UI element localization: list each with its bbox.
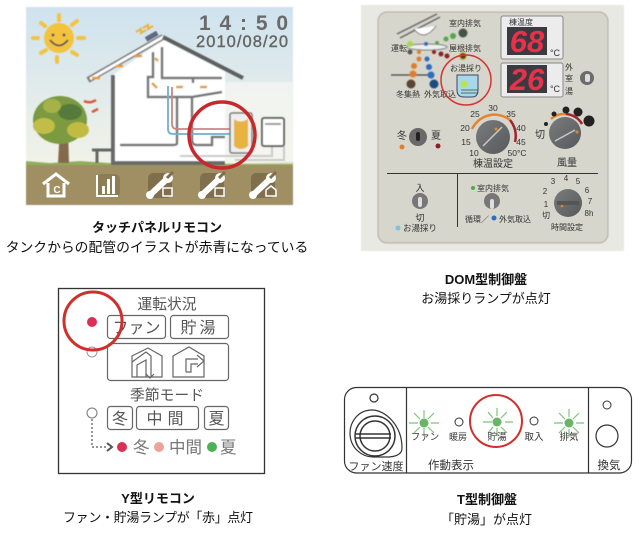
caption: touch panel remote: タッチパネルリモコン (92, 220, 222, 235)
highlight circle (470, 395, 522, 447)
lamp: fan: ファン (411, 432, 439, 443)
board labels (391, 18, 482, 99)
button: fan (108, 316, 166, 338)
board labels: 冬集熱 (396, 89, 420, 99)
airflow diagram (391, 14, 468, 88)
caption: T-type control board (441, 492, 532, 527)
board labels: 外気取込 (424, 89, 456, 99)
toggle: hot water: お湯採り (403, 223, 437, 233)
photo background (361, 5, 624, 251)
toggle: ventilation: 室内排気 (477, 183, 509, 193)
icon: wrench tank (198, 172, 225, 199)
button: hot water storage (170, 316, 228, 338)
knob: airflow (535, 106, 594, 169)
knob: timer (542, 174, 593, 232)
button: mid season: 中間 (146, 410, 189, 428)
highlight circle (441, 55, 491, 105)
lamp: season mode (87, 408, 97, 418)
caption: touch panel remote (6, 220, 308, 255)
knob: timer: 1 (544, 200, 549, 209)
knob: timer: 切 (542, 211, 550, 220)
caption: Y-type remote (63, 491, 253, 525)
panel frame (58, 288, 264, 474)
caption: touch panel remote: タンクからの配管のイラストが赤青になっている (6, 240, 308, 255)
toggle: hot water: 切 (415, 213, 425, 223)
highlight circle (189, 102, 255, 168)
knob: roof temperature: 30 (488, 103, 498, 113)
button: summer: 夏 (208, 411, 225, 428)
caption: DOM control board: お湯採りランプが点灯 (421, 291, 551, 306)
caption: Y-type remote: ファン・貯湯ランプが「赤」点灯 (63, 510, 253, 525)
knob: roof temperature: 25 (470, 109, 480, 119)
knob: roof temperature: 45 (516, 137, 526, 147)
toggle: winter summer: 夏 (431, 130, 441, 142)
lamp: intake: 取入 (524, 432, 544, 443)
lamp: hot water storage (483, 408, 513, 443)
icon: house C: C (53, 185, 61, 196)
button: summer (204, 406, 228, 430)
knob: roof temperature: 棟温設定 (473, 157, 513, 170)
legend: season lamps: 冬 (133, 438, 150, 457)
toggle: winter summer (397, 128, 441, 150)
panel: T-type control board (344, 388, 632, 473)
caption: DOM control board (421, 272, 551, 306)
toggle: ventilation: 循環／ (465, 214, 489, 224)
knob: timer: 8h (585, 209, 593, 218)
lamp: exhaust: 排気 (559, 431, 579, 443)
status lamp: off (87, 347, 97, 357)
illustration: house with ducts (88, 25, 293, 164)
dividers (387, 173, 598, 227)
label: operation display: 作動表示 (428, 458, 474, 472)
caption: DOM control board: DOM型制御盤 (445, 272, 527, 287)
ventilation switch: 換気 (598, 458, 621, 472)
lamp: heating: 暖房 (449, 431, 467, 442)
button: fan: ファン (112, 320, 161, 337)
remote screen background (26, 7, 293, 205)
panel: touch panel remote (26, 7, 293, 205)
knob: timer: 4 (564, 174, 569, 183)
indicator lamps: operation (409, 408, 584, 443)
fan speed dial: ファン速度 (348, 460, 404, 473)
icon: bar graph (96, 174, 120, 197)
toggle: ventilation (465, 183, 531, 224)
icon: sun (33, 15, 84, 62)
heading: operation status: 運転状況 (137, 296, 197, 313)
caption: Y-type remote: Y型リモコン (121, 491, 195, 506)
toggle: hot water (396, 183, 437, 233)
icon: tree (33, 96, 98, 163)
clock date: 2010/08/20 (196, 33, 288, 51)
display: roof temp: °C (550, 48, 561, 58)
board labels: 室内排気 (449, 18, 481, 28)
knob: roof temperature (460, 103, 526, 170)
knob: roof temperature: 50°C (508, 148, 526, 158)
board labels: 運転 (391, 43, 407, 53)
knob: roof temperature: 10 (469, 148, 479, 158)
lamp: hot water storage: 貯湯 (487, 431, 507, 443)
display: outside temp: 26 (509, 62, 545, 97)
knob: roof temperature: 20 (460, 123, 470, 133)
lamp: fan (409, 410, 439, 443)
icon: hot water tank (457, 75, 478, 97)
fan speed dial (348, 394, 404, 473)
panel: DOM control board (361, 5, 624, 251)
knob: timer: 時間設定 (551, 223, 583, 232)
knob: airflow: 風量 (557, 157, 577, 169)
knob: roof temperature: 15 (461, 137, 471, 147)
caption: T-type control board: T型制御盤 (457, 492, 517, 507)
panel: Y-type remote (58, 288, 264, 474)
highlight circle (64, 292, 122, 350)
knob: airflow: 切 (535, 129, 545, 141)
legend: season lamps: 中間 (169, 438, 202, 457)
toggle: ventilation: 外気取込 (499, 214, 531, 224)
knob: timer: 2 (543, 187, 548, 196)
legend: season lamps (117, 438, 236, 457)
icon: wrench fan (146, 172, 173, 199)
caption: T-type control board: 「貯湯」が点灯 (441, 512, 532, 527)
display: roof temp: 68 (510, 24, 545, 59)
button: winter: 冬 (112, 410, 128, 428)
heading: season mode: 季節モード (130, 387, 204, 404)
ventilation switch (596, 401, 621, 472)
icon: house C (43, 174, 69, 196)
toggle: hot water: 入 (415, 183, 425, 193)
board labels: お湯採り (450, 63, 482, 73)
knob: timer: 6 (585, 186, 590, 195)
button: winter (108, 406, 132, 430)
button: hot water storage: 貯湯 (180, 319, 219, 337)
lamp: exhaust (554, 409, 584, 443)
button: mid season (136, 406, 198, 430)
tanks (230, 113, 284, 153)
knob: roof temperature: 35 (506, 109, 516, 119)
display: outside temp: °C (550, 84, 561, 94)
selector labels: 室 (565, 73, 573, 83)
legend: season lamps: 夏 (220, 439, 236, 457)
pipes: red and blue (168, 86, 240, 134)
knob: timer: 3 (551, 177, 556, 186)
icon: wrench house (249, 172, 276, 199)
status lamp: red (87, 317, 97, 327)
knob: timer: 5 (576, 177, 581, 186)
toggle: winter summer: 冬 (397, 129, 407, 142)
board frame (344, 388, 632, 473)
knob: timer: 7 (588, 197, 593, 206)
selector labels: 湯 (565, 86, 573, 96)
board labels: 屋根排気 (449, 43, 481, 53)
clock time: 14:50 (199, 12, 288, 35)
display: roof temp (501, 16, 563, 59)
icon row (43, 172, 276, 199)
knob: roof temperature: 40 (516, 123, 526, 133)
display: roof temp: 棟温度 (509, 17, 533, 27)
selector labels (565, 62, 573, 96)
lamp: heating (449, 418, 467, 442)
button: air direction (108, 344, 228, 380)
selector labels: 外 (565, 62, 573, 72)
display: outside temp (501, 62, 563, 97)
toggle: display selector (580, 71, 594, 85)
lamp: intake (524, 417, 544, 443)
arrow: season indicator (92, 419, 112, 451)
